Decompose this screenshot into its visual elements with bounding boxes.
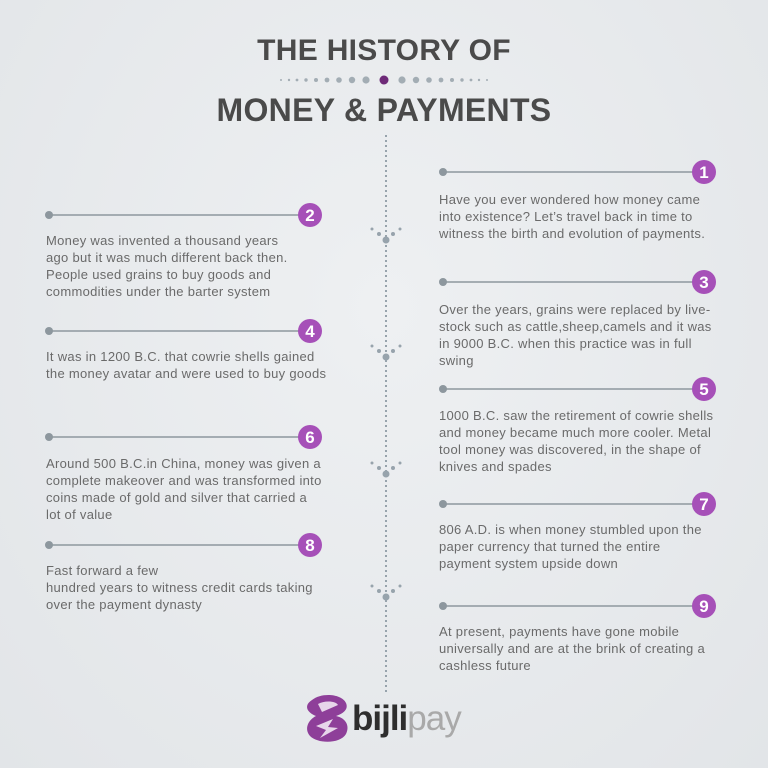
text 4: It was in 1200 B.C. that cowrie shells gained [46, 349, 315, 364]
logo icon [307, 695, 348, 742]
text 6: coins made of gold and silver that carried a [46, 490, 307, 505]
connectors [370, 228, 402, 600]
text 5: knives and spades [439, 459, 552, 474]
text 3: Over the years, grains were replaced by live- [439, 302, 710, 317]
text 1 [439, 192, 705, 241]
timeline graphics: 9 [699, 597, 709, 616]
text 8 [46, 563, 313, 612]
text 2: People used grains to buy goods and [46, 267, 271, 282]
text 2 [46, 233, 288, 299]
text 9: At present, payments have gone mobile [439, 624, 679, 639]
title dots [280, 76, 488, 84]
text 6: complete makeover and was transformed into [46, 473, 322, 488]
item lines [45, 168, 700, 610]
text 2: commodities under the barter system [46, 284, 270, 299]
text 7: 806 A.D. is when money stumbled upon the [439, 522, 702, 537]
timeline graphics: 5 [699, 380, 709, 399]
text 3 [439, 302, 712, 368]
text 2: Money was invented a thousand years [46, 233, 278, 248]
text 5: and money became much more cooler. Metal [439, 425, 711, 440]
text 5: tool money was discovered, in the shape of [439, 442, 701, 457]
text 1: into existence? Let’s travel back in time to [439, 209, 693, 224]
title: the history of: THE HISTORY OF [257, 34, 511, 67]
text 4 [46, 349, 326, 381]
timeline graphics: 6 [305, 428, 315, 447]
text 6 [46, 456, 322, 522]
text 9: universally and are at the brink of creating a [439, 641, 705, 656]
timeline graphics: 1 [699, 163, 709, 182]
title: money & payments: MONEY & PAYMENTS [217, 92, 551, 128]
text 8: hundred years to witness credit cards taking [46, 580, 313, 595]
text 7: payment system upside down [439, 556, 618, 571]
text 9: cashless future [439, 658, 531, 673]
text 2: ago but it was much different back then. [46, 250, 288, 265]
text 3: stock such as cattle,sheep,camels and it was [439, 319, 712, 334]
timeline graphics: 8 [305, 536, 315, 555]
timeline graphics: 4 [305, 322, 315, 341]
text 5: 1000 B.C. saw the retirement of cowrie shells [439, 408, 713, 423]
center dotted line [385, 135, 387, 695]
timeline graphics: 7 [699, 495, 709, 514]
timeline graphics: 3 [699, 273, 709, 292]
text 4: the money avatar and were used to buy goods [46, 366, 326, 381]
text 1: witness the birth and evolution of payments. [439, 226, 705, 241]
text 6: lot of value [46, 507, 112, 522]
text 7 [439, 522, 702, 571]
text 9 [439, 624, 705, 673]
text 8: Fast forward a few [46, 563, 158, 578]
logo text: bijlipay [352, 699, 461, 738]
text 7: paper currency that turned the entire [439, 539, 660, 554]
timeline graphics: 2 [305, 206, 315, 225]
text 5 [439, 408, 713, 474]
text 6: Around 500 B.C.in China, money was given a [46, 456, 321, 471]
number badges [298, 160, 716, 618]
text 3: in 9000 B.C. when this practice was in full [439, 336, 692, 351]
text 3: swing [439, 353, 474, 368]
text 8: over the payment dynasty [46, 597, 202, 612]
text 1: Have you ever wondered how money came [439, 192, 700, 207]
